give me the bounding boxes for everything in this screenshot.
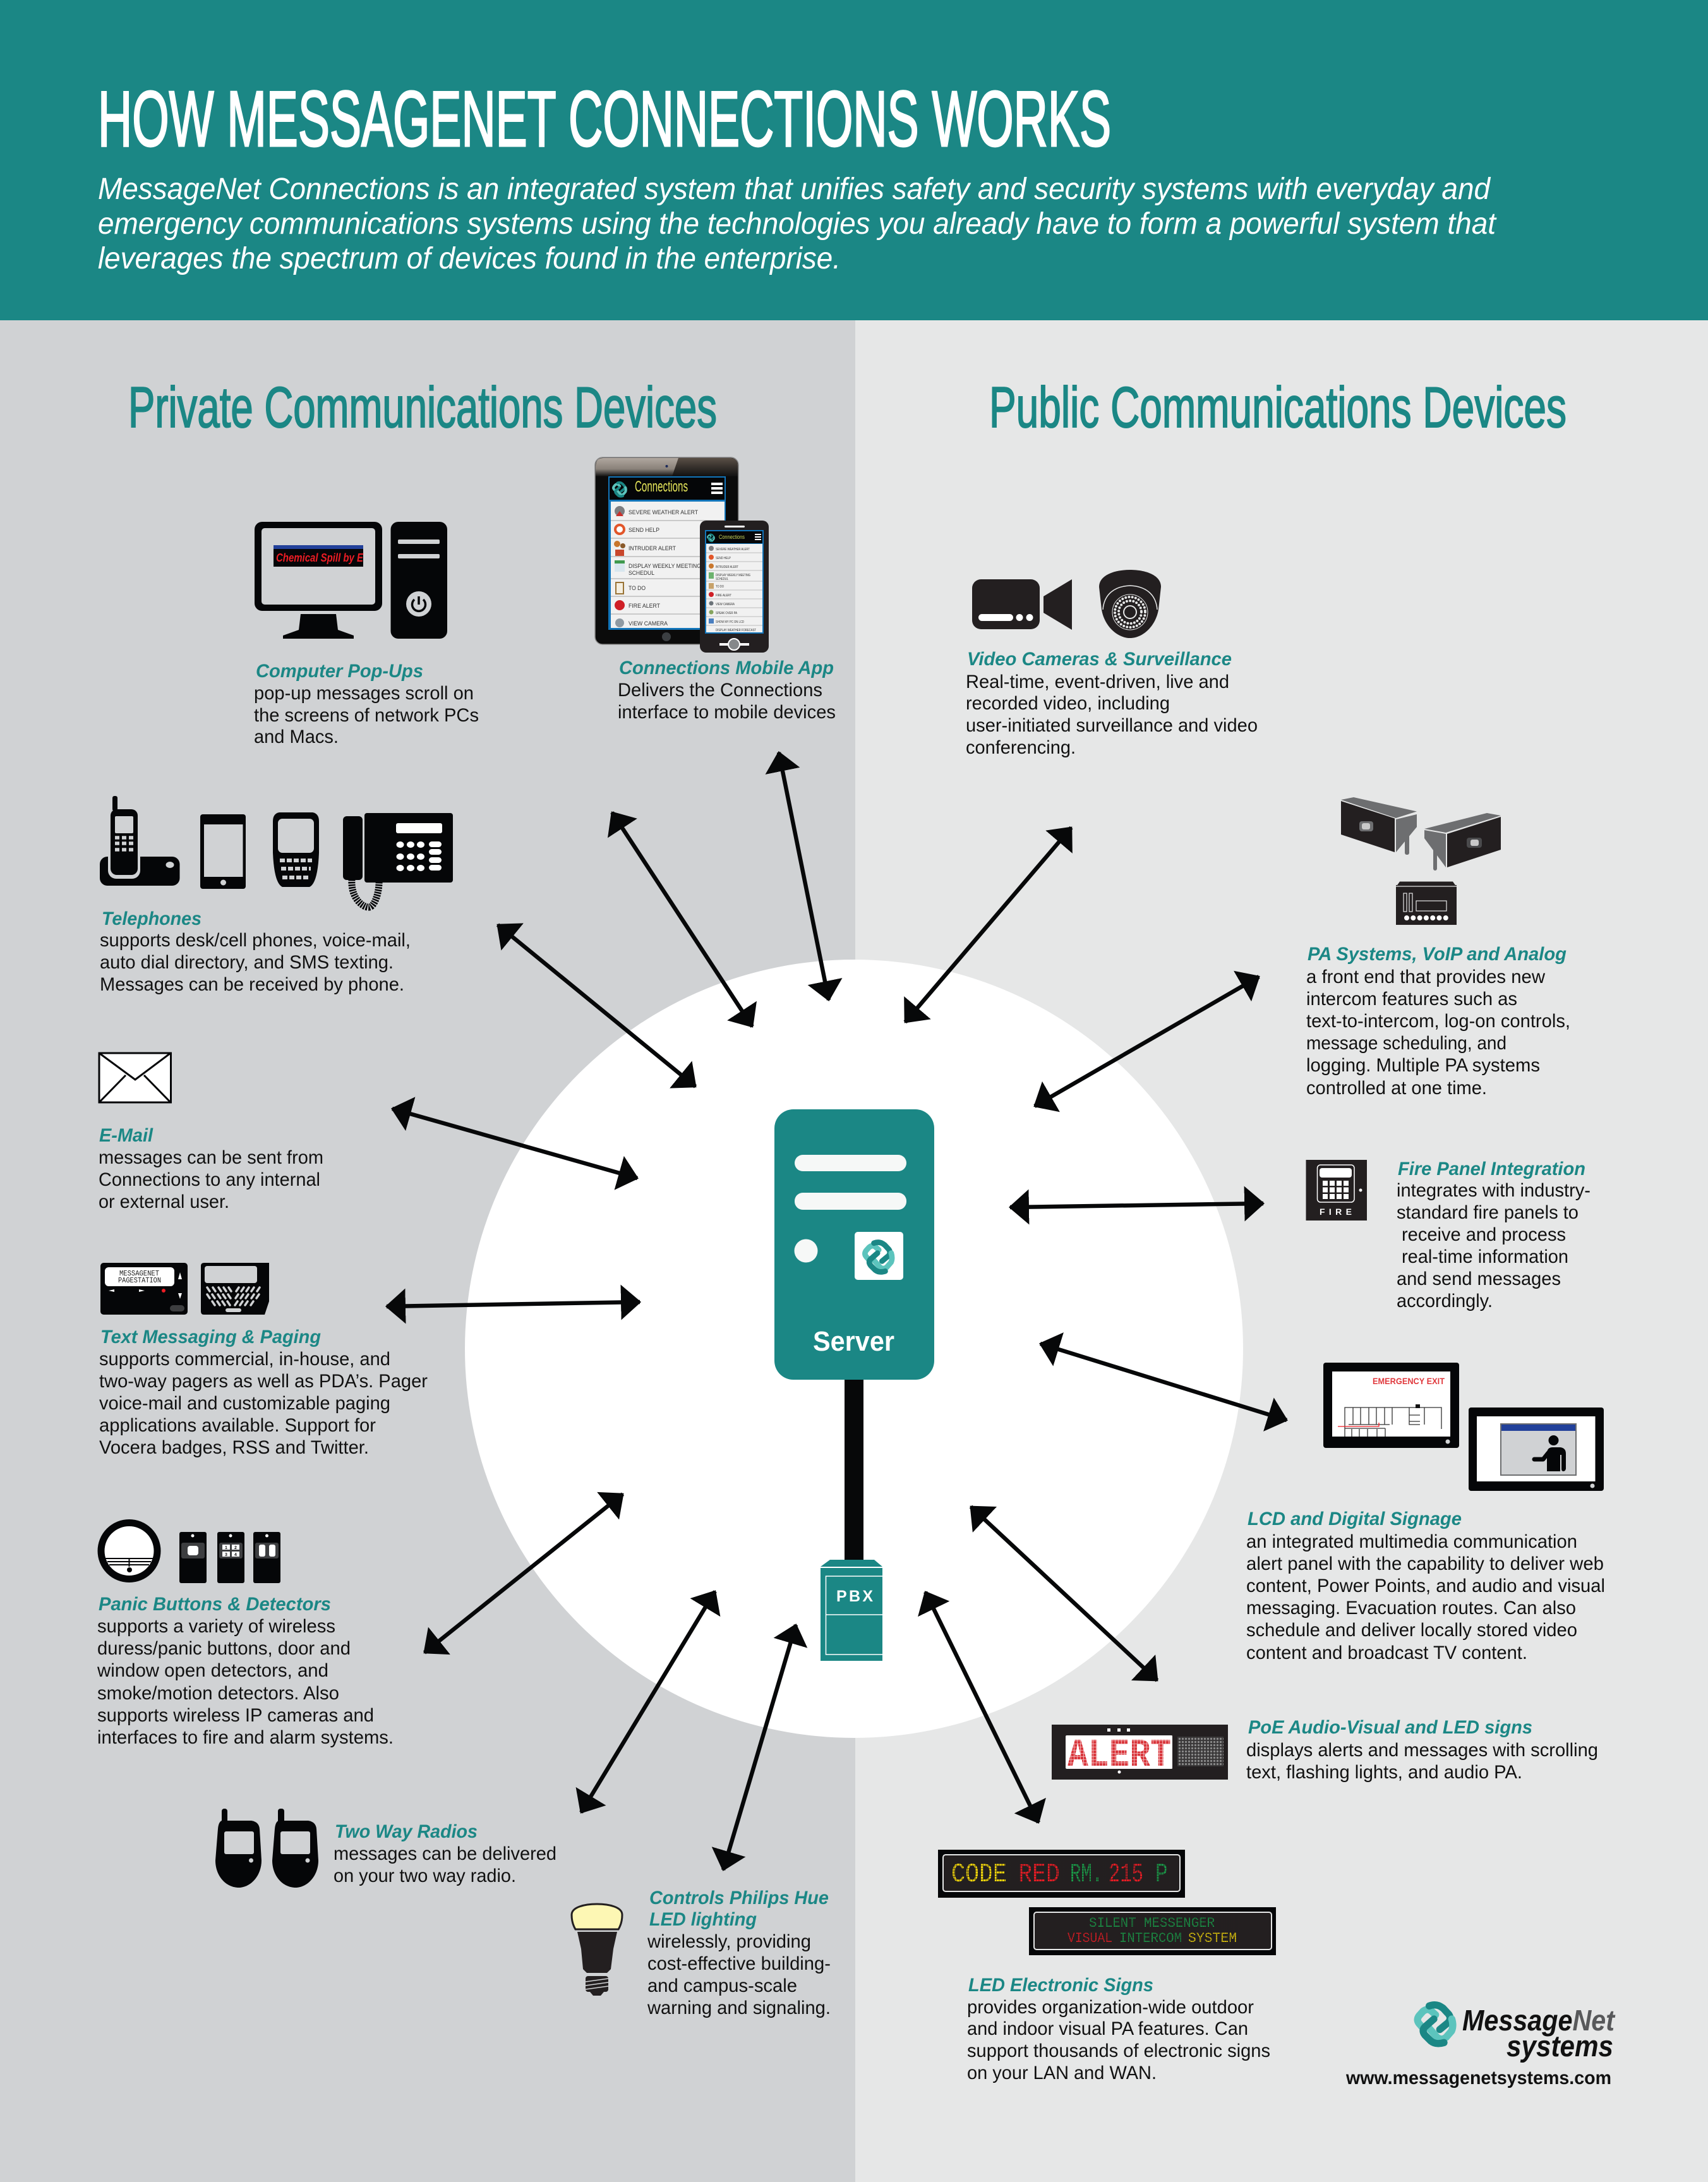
arrow: text messaging: [387, 1302, 640, 1306]
icon: PBX: [821, 1560, 882, 1661]
icon: tablet: VIEW CAMERA: [628, 620, 668, 627]
logo: MessageNet systems: systems: [1507, 2029, 1613, 2063]
connector: server to PBX: [845, 1380, 863, 1560]
icon: tablet: SCHEDUL: [628, 570, 654, 577]
icon: presenter display: [1469, 1407, 1604, 1491]
icon: pager: PAGESTATION: [118, 1276, 161, 1285]
panel: telephones: Telephones: [102, 908, 201, 929]
panel: video cameras and surveillance: user-initiated surveillance and video: [966, 715, 1258, 736]
icon: desktop computer: [255, 522, 447, 639]
icon: LED bulb: [572, 1904, 622, 1996]
icon: envelope: [99, 1053, 171, 1102]
panel: e-mail: Connections to any internal: [99, 1169, 320, 1190]
icon: amplifier: [1396, 882, 1457, 925]
panel: computer pop-ups: and Macs.: [254, 726, 339, 747]
panel: LED electronic signs: on your LAN and WAN.: [967, 2063, 1157, 2083]
panel: PA systems: a front end that provides new: [1306, 967, 1545, 987]
panel: philips hue: cost-effective building-: [647, 1953, 831, 1974]
panel: video cameras and surveillance: Real-time, event-driven, live and: [966, 672, 1229, 692]
panel: text messaging and paging: two-way pagers as well as PDA’s. Pager: [99, 1371, 428, 1392]
panel: philips hue: and campus-scale: [647, 1975, 797, 1996]
panel: fire panel integration: standard fire panels to: [1397, 1202, 1579, 1223]
logo: MessageNet systems: www.messagenetsystems.com: [1345, 2068, 1611, 2089]
panel: e-mail: messages can be sent from: [99, 1147, 323, 1168]
panel: video cameras and surveillance: conferencing.: [966, 737, 1076, 758]
icon: server: Server: [813, 1326, 894, 1357]
icon: video camera: [972, 579, 1072, 630]
panel: LCD and digital signage: alert panel with the capability to deliver web: [1246, 1553, 1604, 1574]
panel: two way radios: on your two way radio.: [334, 1866, 516, 1886]
icon: phone: SCHEDUL: [716, 577, 728, 581]
panel: computer pop-ups: pop-up messages scroll on: [254, 683, 474, 704]
panel: connections mobile app: Connections Mobile App: [619, 658, 834, 678]
icon: silent messenger sign: VISUAL: [1068, 1931, 1112, 1946]
icon: emergency exit display: [1323, 1363, 1459, 1448]
icon: phone: SHOW MY PC ON LCD: [716, 620, 744, 624]
icon: radios: [215, 1809, 318, 1888]
panel: philips hue: wirelessly, providing: [647, 1931, 811, 1952]
panel: PA systems: [1306, 797, 1570, 1099]
panel: video cameras and surveillance: [966, 570, 1258, 758]
icon: tablet: FIRE ALERT: [628, 603, 660, 610]
intro paragraph: [98, 172, 1497, 275]
icon: tablet: INTRUDER ALERT: [628, 545, 676, 552]
panel: telephones: Messages can be received by phone.: [100, 974, 404, 995]
icon: desktop computer: Chemical Spill by E: [276, 552, 364, 564]
panel: connections mobile app: [595, 457, 836, 723]
panel: PA systems: logging. Multiple PA systems: [1306, 1055, 1540, 1076]
arrow: mobile app: [779, 752, 829, 1000]
icon: phone: INTRUDER ALERT: [716, 565, 738, 569]
arrow: PoE signs: [971, 1507, 1157, 1680]
arrow: panic buttons: [424, 1494, 623, 1653]
icon: phone: TO DO: [716, 585, 724, 589]
panel: PA systems: intercom features such as: [1306, 989, 1517, 1010]
icon: tablet: TO DO: [628, 585, 646, 592]
panel: LED electronic signs: and indoor visual PA features. Can: [967, 2018, 1248, 2039]
panel: PA systems: PA Systems, VoIP and Analog: [1308, 944, 1567, 965]
panel: fire panel integration: and send messages: [1397, 1269, 1561, 1289]
arrow: telephones: [498, 925, 695, 1087]
panel: PoE audio-visual and LED signs: displays alerts and messages with scrolling: [1246, 1740, 1598, 1761]
panel: philips hue: warning and signaling.: [647, 1998, 831, 2018]
icon: speakers: [1341, 797, 1501, 871]
panel: LCD and digital signage: LCD and Digital Signage: [1248, 1509, 1462, 1529]
panel: connections mobile app: interface to mobile devices: [618, 702, 836, 723]
panel: LCD and digital signage: schedule and deliver locally stored video: [1246, 1620, 1577, 1641]
icon: tablet: SEVERE WEATHER ALERT: [628, 509, 698, 516]
icon: phone: Connections: [719, 534, 745, 540]
arrow: computer pop-ups: [612, 812, 752, 1027]
arrows: [387, 752, 1287, 1870]
icon: dome camera: [1099, 570, 1161, 638]
icon: PDA pager: [201, 1263, 269, 1315]
icon: code red sign: RED: [1018, 1859, 1060, 1890]
panel: telephones: supports desk/cell phones, voice-mail,: [100, 930, 411, 951]
arrow: video cameras: [905, 828, 1071, 1022]
intro paragraph: emergency communications systems using the technologies you already have to form a powerful system that: [98, 207, 1497, 241]
background: private panel: [0, 320, 855, 2182]
panel: panic buttons and detectors: [97, 1522, 394, 1748]
icon: fire panel: FIRE: [1320, 1207, 1352, 1217]
heading: private communications devices: Private Communications Devices: [128, 376, 717, 440]
panel: panic buttons and detectors: interfaces to fire and alarm systems.: [97, 1727, 394, 1748]
logo: MessageNet systems: MessageNet: [1462, 2004, 1616, 2037]
logo: MessageNet systems: [1345, 2004, 1616, 2089]
panel: LED electronic signs: support thousands of electronic signs: [967, 2040, 1270, 2061]
panel: e-mail: E-Mail: [99, 1125, 153, 1146]
panel: panic buttons and detectors: supports a variety of wireless: [97, 1616, 335, 1637]
panel: PA systems: text-to-intercom, log-on controls,: [1306, 1011, 1570, 1032]
panel: e-mail: or external user.: [99, 1191, 229, 1212]
panel: telephones: auto dial directory, and SMS texting.: [100, 952, 394, 973]
panel: philips hue: [572, 1888, 831, 2018]
panel: philips hue: Controls Philips Hue: [649, 1888, 829, 1908]
icon: round detector: [101, 1522, 157, 1579]
icon: phone: VIEW CAMERA: [716, 603, 735, 606]
panel: fire panel integration: integrates with industry-: [1397, 1180, 1591, 1201]
arrow: e-mail: [392, 1109, 637, 1178]
icon: phone: DISPLAY WEATHER FORECAST: [716, 629, 756, 632]
panel: fire panel integration: real-time information: [1402, 1246, 1568, 1267]
icon: wireless remotes: [179, 1532, 280, 1583]
panel: text messaging and paging: Text Messaging & Paging: [100, 1327, 321, 1347]
panel: e-mail: [99, 1053, 323, 1212]
panel: text messaging and paging: voice-mail and customizable paging: [99, 1393, 390, 1414]
icon: emergency exit display: EMERGENCY EXIT: [1373, 1376, 1445, 1386]
panel: text messaging and paging: supports commercial, in-house, and: [99, 1349, 390, 1370]
icon: tablet phone: [200, 814, 246, 889]
icon: silent messenger sign: SILENT MESSENGER: [1089, 1915, 1215, 1931]
icon: wireless remotes: 4: [234, 1553, 237, 1557]
icon: code red sign: 215: [1109, 1859, 1143, 1890]
icon: fire panel: [1306, 1160, 1367, 1221]
icon: phone: SPEAK OVER PA: [716, 612, 738, 615]
panel: connections mobile app: Delivers the Connections: [618, 680, 822, 701]
icon: silent messenger sign: [1029, 1907, 1276, 1955]
panel: LCD and digital signage: [1246, 1363, 1605, 1663]
panel: video cameras and surveillance: recorded video, including: [966, 693, 1170, 714]
panel: text messaging and paging: applications available. Support for: [99, 1415, 376, 1436]
icon: phone: [700, 521, 769, 653]
icon: code red sign: RM.: [1070, 1859, 1103, 1890]
icon: smartphone keypad: [273, 812, 319, 887]
icon: wireless remotes: 2: [234, 1546, 237, 1550]
panel: fire panel integration: receive and process: [1402, 1224, 1566, 1245]
panel: LCD and digital signage: messaging. Evacuation routes. Can also: [1246, 1598, 1576, 1618]
icon: phone: SEVERE WEATHER ALERT: [716, 548, 750, 552]
panel: LCD and digital signage: content, Power Points, and audio and visual: [1246, 1576, 1605, 1596]
panel: panic buttons and detectors: window open detectors, and: [97, 1660, 328, 1681]
panel: computer pop-ups: [254, 522, 479, 747]
panel: LED electronic signs: LED Electronic Signs: [968, 1975, 1153, 1996]
panel: fire panel integration: accordingly.: [1397, 1291, 1493, 1311]
icon: code red sign: P: [1155, 1859, 1168, 1890]
panel: telephones: [100, 796, 453, 995]
panel: two way radios: messages can be delivered: [334, 1843, 556, 1864]
panel: fire panel integration: [1306, 1159, 1591, 1311]
icon: wireless remotes: 3: [225, 1553, 227, 1557]
header banner: [0, 0, 1708, 320]
arrow: LED signs: [925, 1592, 1038, 1823]
icon: pager: MESSAGENET: [119, 1269, 159, 1278]
panel: panic buttons and detectors: duress/panic buttons, door and: [97, 1638, 351, 1659]
icon: logo mark: [1417, 2005, 1453, 2044]
panel: panic buttons and detectors: Panic Buttons & Detectors: [99, 1594, 331, 1615]
intro paragraph: leverages the spectrum of devices found in the enterprise.: [98, 242, 841, 275]
panel: text messaging and paging: Vocera badges, RSS and Twitter.: [99, 1437, 369, 1458]
icon: alert sign: ALERT: [1068, 1733, 1171, 1778]
icon: tablet: SEND HELP: [628, 527, 659, 534]
icon: phone: DISPLAY WEEKLY MEETING: [716, 574, 750, 577]
panel: computer pop-ups: the screens of network PCs: [254, 705, 479, 726]
arrow: two way radios: [581, 1591, 715, 1812]
panel: panic buttons and detectors: smoke/motion detectors. Also: [97, 1683, 339, 1704]
panel: two way radios: [215, 1809, 556, 1888]
icon: phone: FIRE ALERT: [716, 594, 731, 598]
arrow: fire panel: [1010, 1203, 1263, 1207]
panel: PoE audio-visual and LED signs: text, flashing lights, and audio PA.: [1246, 1762, 1522, 1783]
panel: PA systems: message scheduling, and: [1306, 1033, 1507, 1054]
panel: video cameras and surveillance: Video Cameras & Surveillance: [967, 649, 1232, 670]
background: public panel: [855, 320, 1708, 2182]
arrow: LCD signage: [1040, 1344, 1287, 1420]
icon: pager: [100, 1263, 188, 1315]
icon: wireless remotes: 1: [225, 1546, 227, 1550]
arrow: PA systems: [1035, 977, 1259, 1106]
panel: LCD and digital signage: content and broadcast TV content.: [1246, 1643, 1527, 1663]
panel: philips hue: LED lighting: [649, 1909, 757, 1930]
icon: cordless phone: [100, 796, 179, 886]
panel: PA systems: controlled at one time.: [1306, 1078, 1487, 1099]
panel: LED electronic signs: [938, 1850, 1276, 2083]
icon: code red sign: CODE: [951, 1859, 1007, 1890]
panel: LCD and digital signage: an integrated multimedia communication: [1246, 1531, 1577, 1552]
icon: silent messenger sign: SYSTEM: [1188, 1931, 1237, 1946]
icon: silent messenger sign: INTERCOM: [1119, 1931, 1182, 1946]
panel: two way radios: Two Way Radios: [335, 1821, 478, 1842]
icon: phone: SEND HELP: [716, 557, 731, 560]
panel: text messaging and paging: [99, 1263, 428, 1458]
arrow: philips hue: [723, 1625, 796, 1870]
icon: server: [774, 1109, 934, 1380]
icon: PBX: PBX: [836, 1588, 873, 1605]
icon: tablet: DISPLAY WEEKLY MEETING: [628, 563, 701, 570]
intro paragraph: MessageNet Connections is an integrated system that unifies safety and security systems with everyday and: [98, 172, 1491, 206]
panel: PoE audio-visual and LED signs: PoE Audio-Visual and LED signs: [1248, 1717, 1532, 1738]
icon: desk phone: [343, 813, 453, 907]
icon: alert sign: [1052, 1725, 1228, 1780]
panel: computer pop-ups: Computer Pop-Ups: [256, 661, 423, 682]
panel: LED electronic signs: provides organization-wide outdoor: [967, 1997, 1254, 2018]
icon: tablet: [595, 457, 738, 644]
panel: panic buttons and detectors: supports wireless IP cameras and: [97, 1705, 374, 1726]
icon: tablet: Connections: [635, 478, 688, 495]
icon: code red sign: [938, 1850, 1185, 1898]
panel: fire panel integration: Fire Panel Integration: [1398, 1159, 1585, 1179]
central white circle: [465, 960, 1243, 1738]
panel: PoE audio-visual and LED signs: [1052, 1717, 1598, 1783]
